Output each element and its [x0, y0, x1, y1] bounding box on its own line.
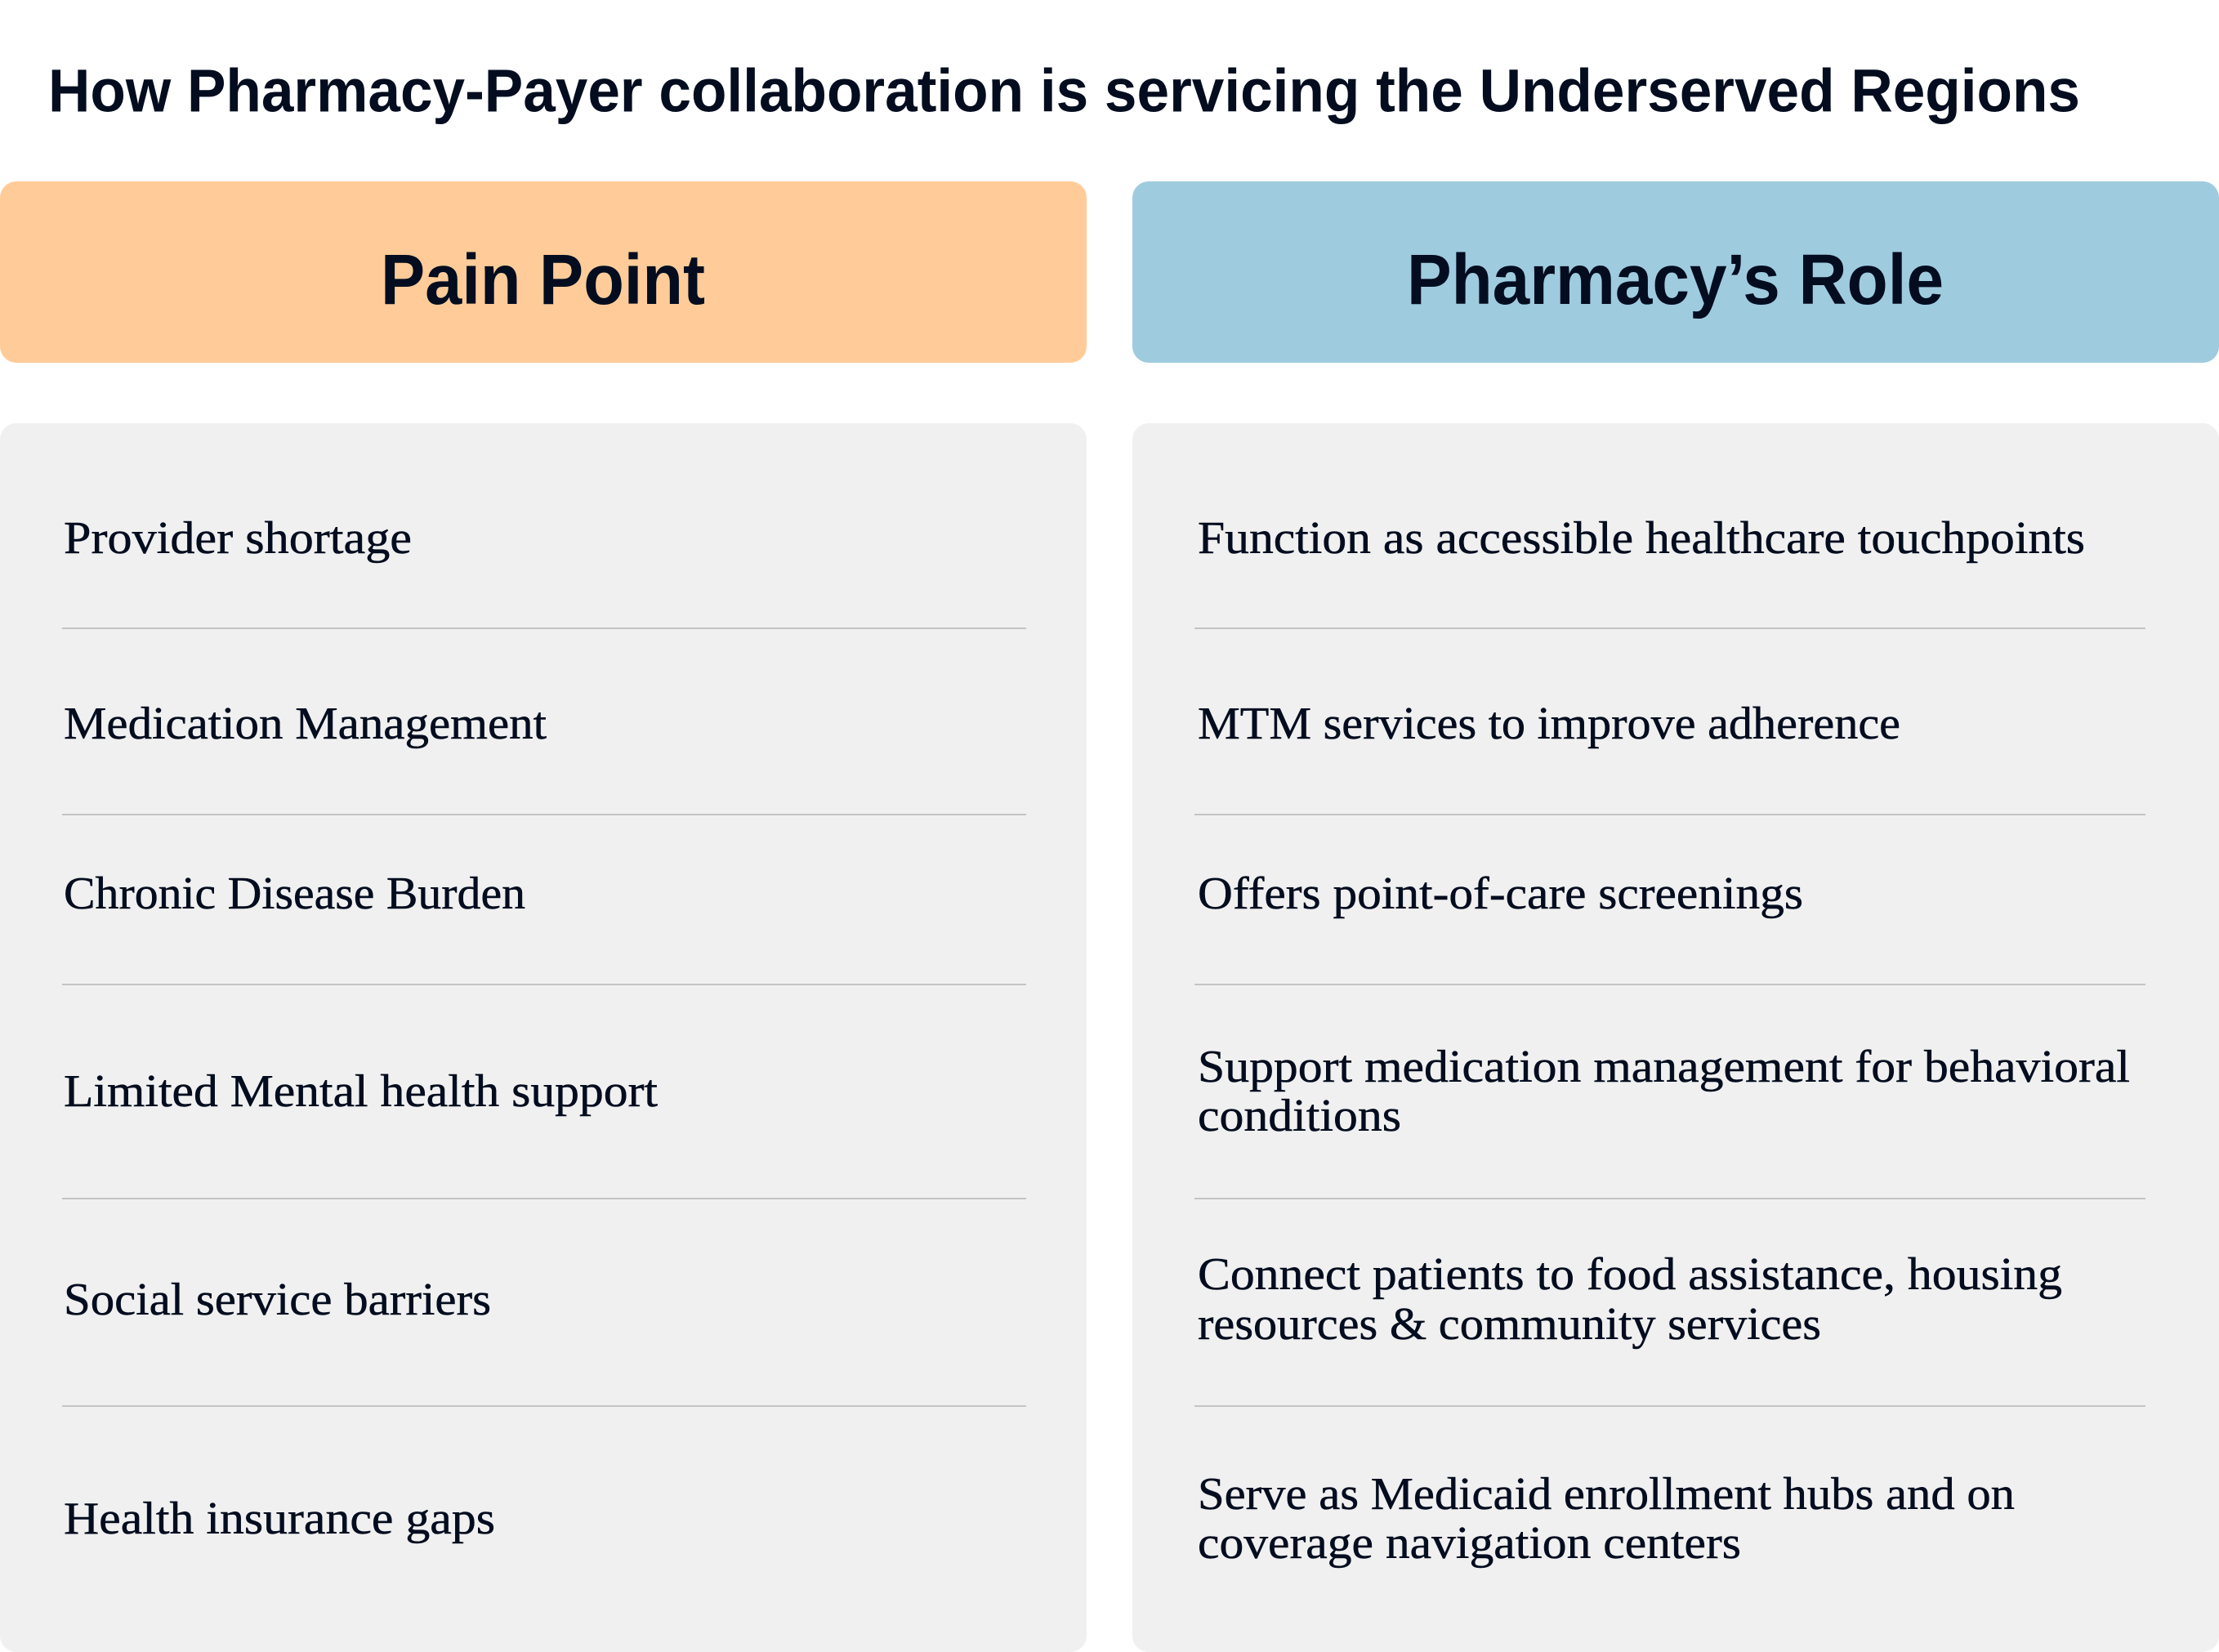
text: social resource connection: [1198, 1249, 2062, 1350]
panel: pain point header: [0, 181, 1087, 363]
text: limited mental health support: Limited Mental health support: [64, 1066, 658, 1117]
text: behavioral medication support: [1198, 1042, 2130, 1141]
text: social resource connection: resources & community services: [1198, 1299, 1821, 1350]
text: point-of-care screenings: Offers point-of-care screenings: [1198, 868, 1803, 919]
panel: pharmacy's role list: [1132, 423, 2219, 1652]
text: chronic disease burden: Chronic Disease Burden: [64, 868, 525, 919]
panel: pharmacy's role header: [1132, 181, 2219, 363]
text: mtm services: MTM services to improve adherence: [1198, 699, 1900, 749]
panel: pain point list: [0, 423, 1087, 1652]
text: social resource connection: Connect patients to food assistance, housing: [1198, 1249, 2062, 1300]
title: How Pharmacy-Payer collaboration is servicing the Underserved Regions: [48, 57, 2080, 124]
text: medicaid enrollment hubs: Serve as Medicaid enrollment hubs and on: [1198, 1469, 2015, 1520]
heading: pharmacy's role: Pharmacy’s Role: [1407, 240, 1944, 319]
text: medication management: Medication Management: [64, 699, 547, 749]
text: provider shortage: Provider shortage: [64, 513, 412, 564]
text: behavioral medication support: conditions: [1198, 1091, 1401, 1141]
text: health insurance gaps: Health insurance gaps: [64, 1493, 495, 1544]
text: accessible touchpoints: Function as accessible healthcare touchpoints: [1198, 513, 2085, 564]
text: social service barriers: Social service barriers: [64, 1275, 491, 1325]
text: behavioral medication support: Support medication management for behavioral: [1198, 1042, 2130, 1092]
text: medicaid enrollment hubs: coverage navigation centers: [1198, 1518, 1741, 1569]
text: medicaid enrollment hubs: [1198, 1469, 2015, 1569]
heading: pain point: Pain Point: [381, 240, 705, 319]
